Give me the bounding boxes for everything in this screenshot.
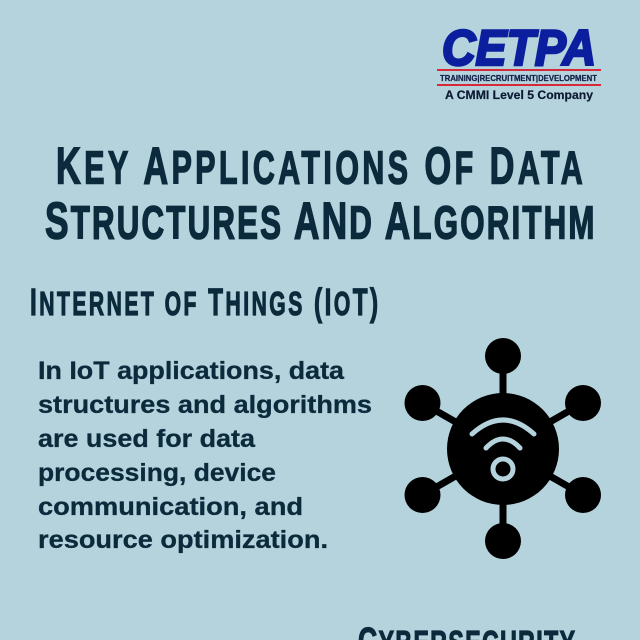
wifi signal bbox=[472, 420, 534, 479]
body line 2: structures and algorithms bbox=[38, 391, 372, 419]
body line 3: are used for data bbox=[38, 425, 256, 453]
title bbox=[45, 137, 594, 250]
body line 5: communication, and bbox=[38, 493, 303, 521]
logo top rule bbox=[437, 69, 601, 71]
logo tagline: TRAINING|RECRUITMENT|DEVELOPMENT bbox=[440, 73, 598, 83]
logo subtitle: A CMMI Level 5 Company bbox=[445, 90, 594, 102]
logo: CETPA bbox=[437, 20, 601, 102]
central hub bbox=[447, 393, 559, 505]
icon: IoT network hub with wifi bbox=[404, 338, 601, 559]
text block: IoT description bbox=[38, 357, 372, 554]
body line 6: resource optimization. bbox=[38, 526, 328, 554]
heading: Internet of Things: INTERNET OF THINGS (IOT) bbox=[30, 280, 378, 323]
hub spokes bbox=[422, 356, 583, 541]
logo bottom rule bbox=[437, 84, 601, 86]
title line 1: KEY APPLICATIONS OF DATA bbox=[56, 137, 583, 195]
outer nodes bbox=[404, 338, 601, 559]
title line 2: STRUCTURES AND ALGORITHM bbox=[45, 193, 594, 250]
body line 4: processing, device bbox=[38, 459, 276, 487]
logo wordmark: CETPA bbox=[442, 20, 596, 76]
body line 1: In IoT applications, data bbox=[38, 357, 345, 385]
